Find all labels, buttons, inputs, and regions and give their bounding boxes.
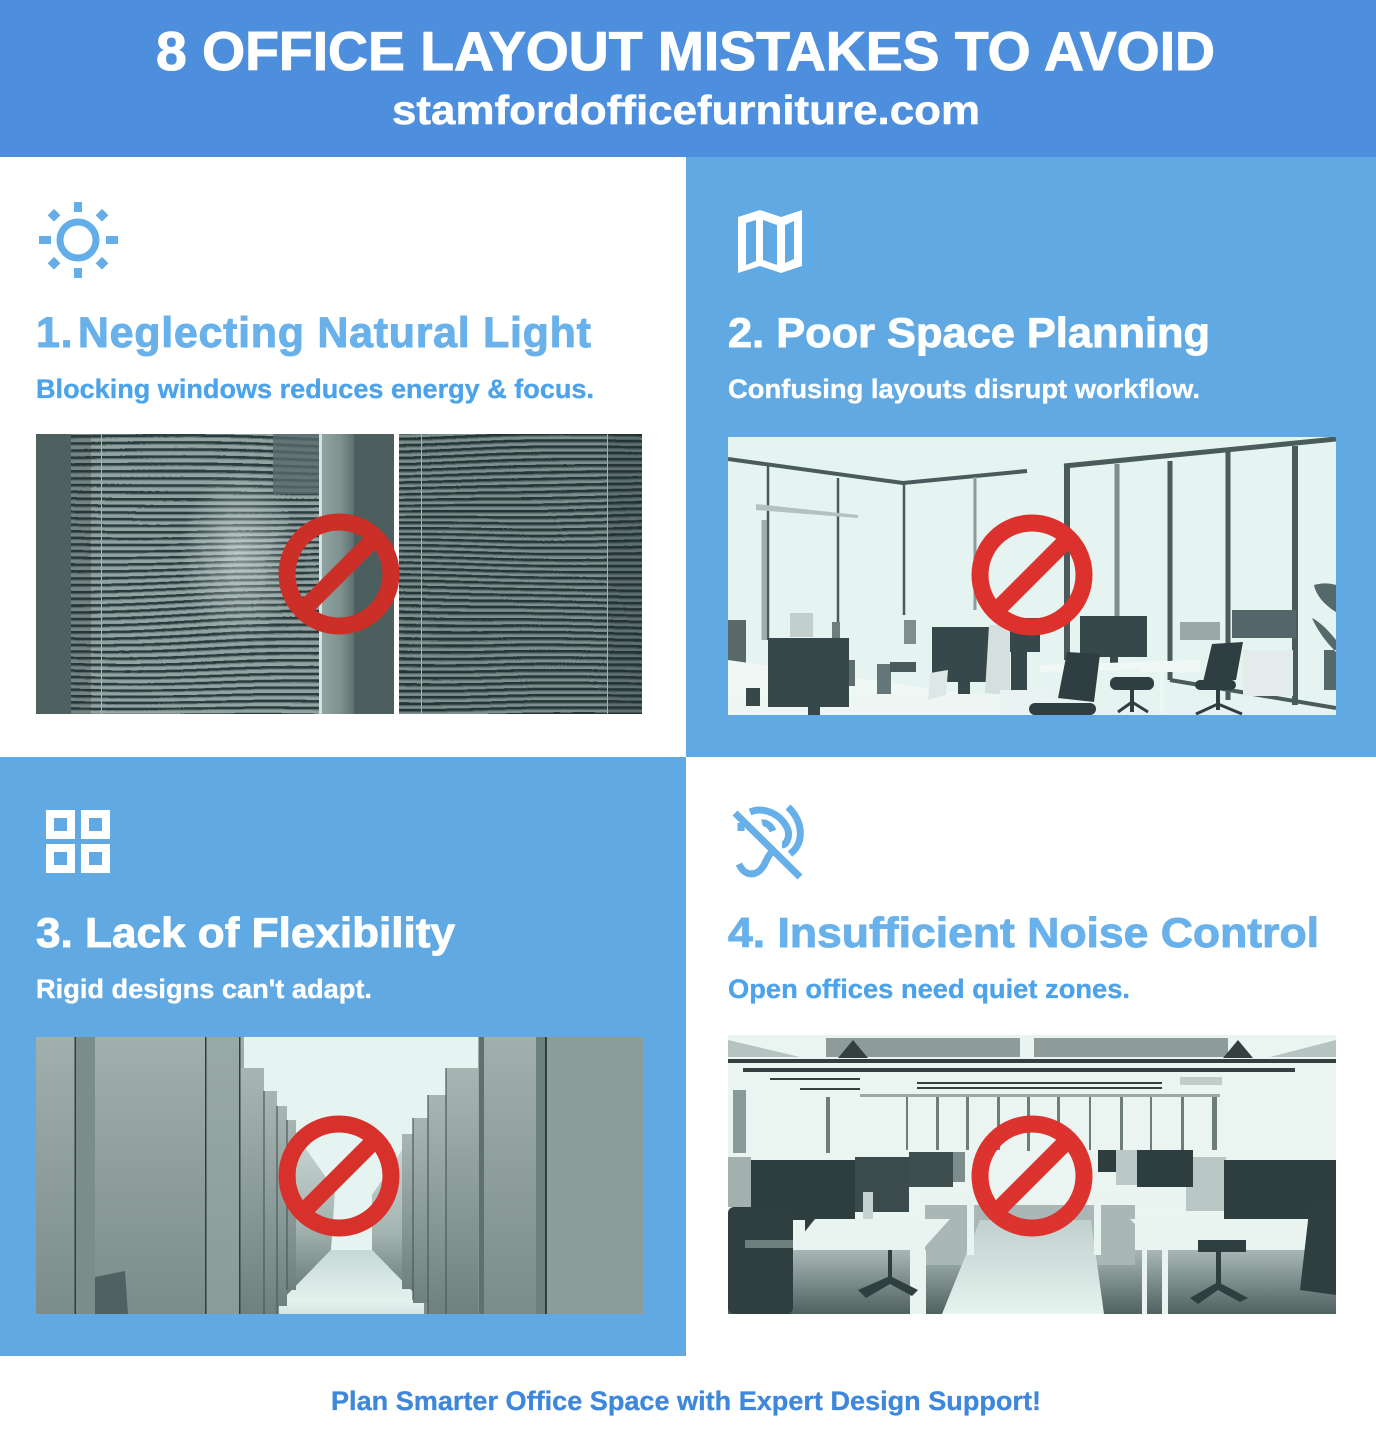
photo: bright open office: [728, 437, 1336, 715]
prohibition sign 1: [287, 522, 391, 626]
description 1: Blocking windows reduces energy & focus.: [36, 374, 594, 404]
monitor and tower cluster: [746, 616, 1147, 715]
prohibition sign 4: [980, 1124, 1084, 1228]
description 4: Open offices need quiet zones.: [728, 974, 1130, 1004]
panel: neglecting natural light: [36, 202, 642, 714]
desks: [805, 1205, 1308, 1314]
description 3: Rigid designs can't adapt.: [36, 974, 372, 1004]
heading 4: 4. Insufficient Noise Control: [728, 909, 1319, 956]
stepped right walls: [402, 1068, 478, 1314]
footer call to action: Plan Smarter Office Space with Expert Design Support!: [331, 1386, 1041, 1416]
receding corridor walls: [287, 1148, 335, 1294]
plant: [1312, 583, 1336, 690]
photo: closed window blinds: [36, 434, 642, 714]
chairs: [728, 1203, 1336, 1314]
photo: open-plan office with desks: [728, 1035, 1336, 1314]
icon: muted ear: [735, 807, 800, 877]
desk chairs: [1029, 642, 1243, 715]
prohibition sign 2: [980, 523, 1084, 627]
monitors: [751, 1150, 1336, 1240]
title: 8 OFFICE LAYOUT MISTAKES TO AVOID: [156, 21, 1215, 82]
photo: rigid corridor of walls: [36, 1037, 643, 1314]
panel: poor space planning: [686, 157, 1376, 757]
header banner: [0, 0, 1376, 157]
heading 2: 2. Poor Space Planning: [728, 309, 1210, 356]
icon: sun: [39, 202, 118, 278]
prohibition sign 3: [287, 1124, 391, 1228]
corridor floor: [279, 1250, 424, 1314]
panel: lack of flexibility: [0, 757, 686, 1356]
icon: folded map: [738, 210, 802, 273]
heading 1: 1. Neglecting Natural Light: [36, 309, 592, 357]
description 2: Confusing layouts disrupt workflow.: [728, 374, 1200, 404]
icon: grid of squares: [50, 814, 106, 869]
heading 3: 3. Lack of Flexibility: [36, 909, 456, 956]
website url: stamfordofficefurniture.com: [392, 87, 980, 133]
window mullions: [826, 1095, 1217, 1153]
panel: insufficient noise control: [728, 804, 1336, 1314]
floor: [728, 1250, 1336, 1314]
stepped left walls: [240, 1068, 296, 1314]
